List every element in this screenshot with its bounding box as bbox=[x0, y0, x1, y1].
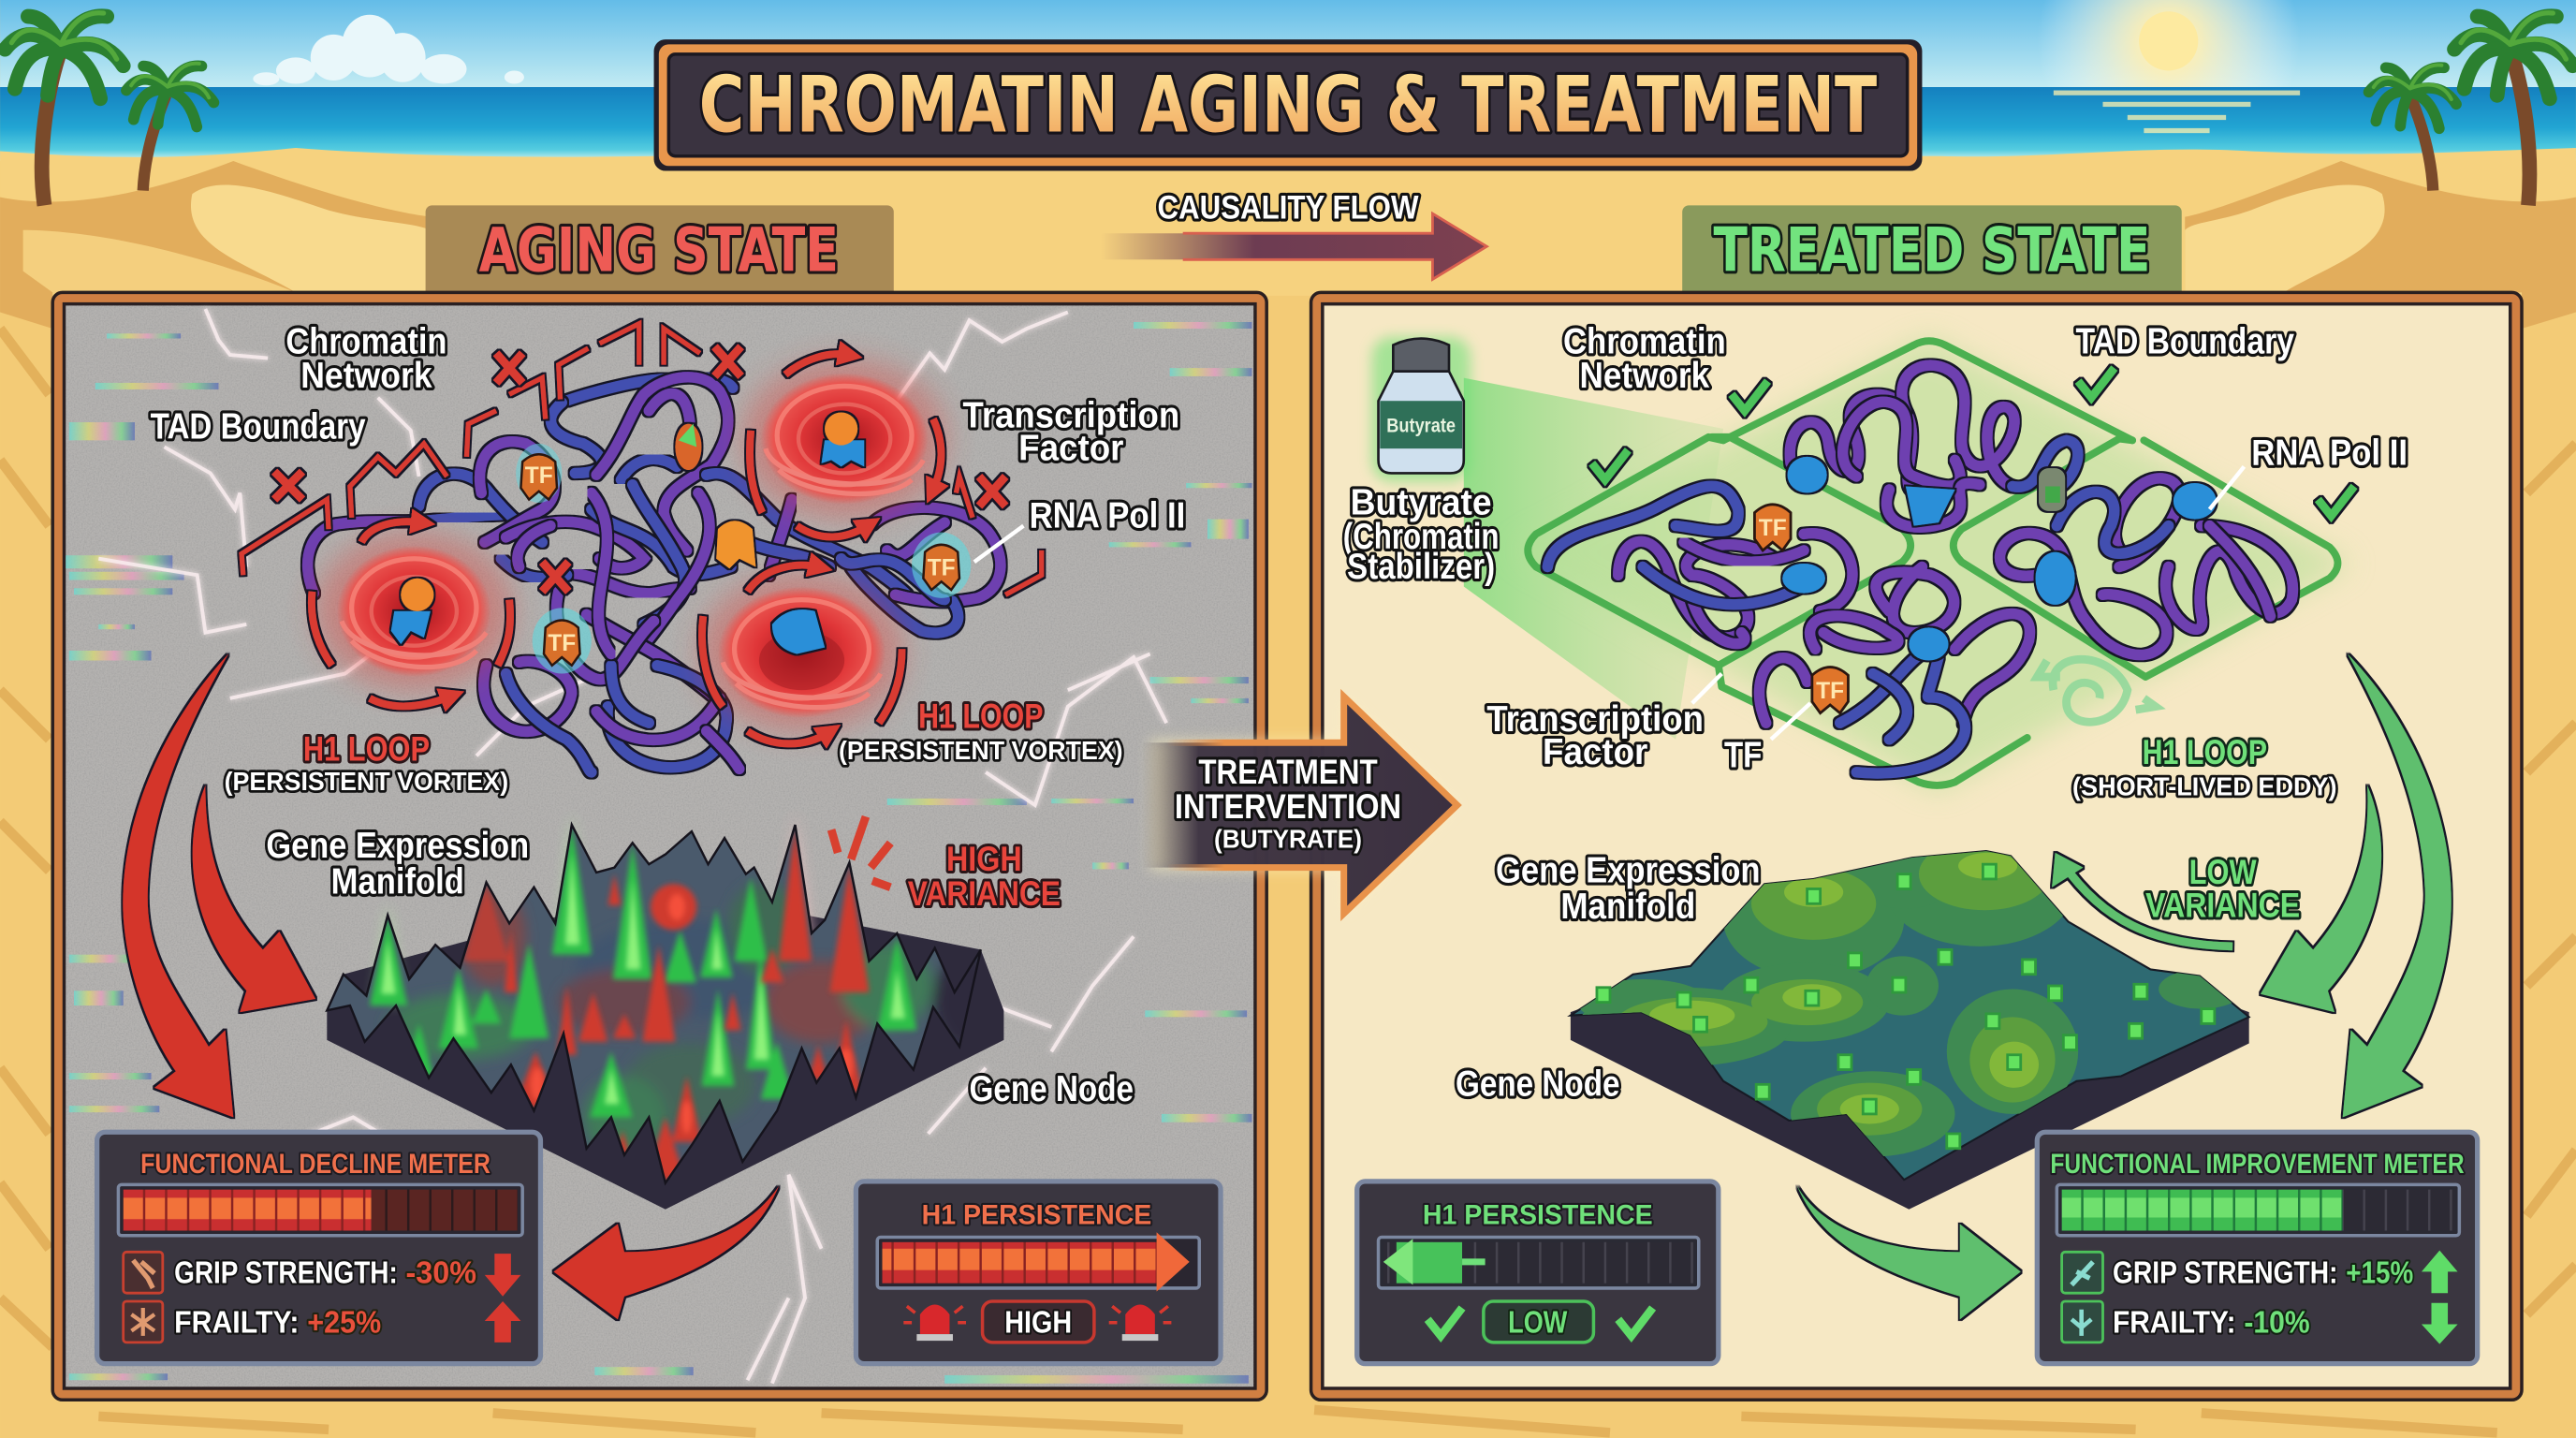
arrow: mid red causal bbox=[193, 785, 315, 1012]
icon: check left bbox=[1427, 1308, 1462, 1336]
metric: grip improved: GRIP STRENGTH: bbox=[2113, 1256, 2337, 1291]
label: transcription factor: Transcription bbox=[963, 395, 1179, 435]
label: chromatin network treated bbox=[1563, 321, 1726, 396]
arrow: treatment intervention: INTERVENTION bbox=[1175, 787, 1401, 826]
chart: spiky gene expression manifold bbox=[320, 814, 1010, 1210]
chromatin: top domain bbox=[1790, 365, 2078, 527]
icon: TF badge 2 bbox=[533, 608, 592, 674]
sky bbox=[0, 0, 2576, 89]
label: chromatin network treated: Network bbox=[1580, 356, 1710, 396]
label: chromatin network treated: Chromatin bbox=[1563, 321, 1726, 361]
metric: grip improved: +15% bbox=[2346, 1256, 2413, 1291]
label: transcription factor treated bbox=[1486, 674, 1721, 772]
label: chromatin network: Chromatin bbox=[285, 321, 446, 361]
sun reflection bbox=[2054, 91, 2300, 133]
label: TF bbox=[1724, 703, 1810, 776]
icon: TF badge treated 1: TF bbox=[1759, 516, 1787, 541]
label: butyrate: (Chromatin bbox=[1343, 517, 1500, 557]
red X marks bbox=[274, 346, 1005, 592]
shoreline bbox=[0, 148, 2576, 296]
icon: arrow down green bbox=[2422, 1303, 2458, 1344]
panel: treated state bbox=[1311, 292, 2522, 1400]
TAD lattice bbox=[1528, 341, 2337, 785]
lightning bbox=[98, 309, 1166, 1384]
icon: TF badge 3 bbox=[912, 533, 971, 598]
arrow: green to improvement meter bbox=[1797, 1186, 2021, 1319]
arrow: treatment intervention bbox=[1142, 697, 1457, 914]
icon: check right bbox=[1618, 1308, 1653, 1336]
persistence bar low bbox=[1379, 1238, 1699, 1288]
label: H1 loop short-lived: H1 LOOP bbox=[2143, 733, 2267, 771]
persistence bar bbox=[877, 1232, 1199, 1291]
label: H1 loop short-lived: (SHORT-LIVED EDDY) bbox=[2072, 771, 2337, 800]
icon: alarm right bbox=[1109, 1304, 1171, 1341]
label: gene expression manifold treated bbox=[1496, 850, 1761, 927]
functional improvement meter: FUNCTIONAL IMPROVEMENT METER bbox=[2050, 1149, 2465, 1180]
icon: polymerase blobs bbox=[1782, 457, 2217, 661]
metric: frailty improved: -10% bbox=[2244, 1305, 2310, 1340]
check marks bbox=[1592, 368, 2354, 516]
icon: green marker protein bbox=[2039, 468, 2065, 511]
vortex: top right bbox=[742, 360, 946, 518]
label: H1 loop right: (PERSISTENT VORTEX) bbox=[839, 736, 1123, 765]
label: low variance: VARIANCE bbox=[2145, 886, 2300, 924]
title: CHROMATIN AGING & TREATMENT bbox=[699, 60, 1877, 150]
gene nodes bbox=[1597, 864, 2215, 1149]
chromatin: right domain bbox=[2000, 478, 2292, 655]
broken TAD boundary bbox=[242, 324, 1042, 594]
functional decline meter bbox=[97, 1132, 540, 1364]
metric: frailty improved: FRAILTY: bbox=[2113, 1305, 2236, 1340]
functional improvement meter bbox=[2037, 1132, 2478, 1364]
label: H1 loop left: (PERSISTENT VORTEX) bbox=[225, 767, 508, 796]
icon: palm tree left large bbox=[5, 13, 124, 205]
label: gene expression manifold bbox=[266, 826, 529, 902]
icon: palm tree right small bbox=[2369, 65, 2456, 191]
chromatin: left domain bbox=[1547, 486, 1852, 644]
label: high variance bbox=[831, 816, 1061, 913]
icon: protein in left vortex bbox=[391, 579, 433, 644]
label: gene expression manifold treated: Gene Expression bbox=[1496, 850, 1761, 890]
label: high variance: VARIANCE bbox=[908, 874, 1061, 913]
icon: palm tree right large bbox=[2454, 13, 2572, 205]
vortex: lower right bbox=[700, 574, 903, 731]
vortex: left bbox=[315, 533, 513, 690]
label: gene node: Gene Node bbox=[970, 1069, 1134, 1109]
label: butyrate: Stabilizer) bbox=[1347, 547, 1495, 587]
glitch bars bbox=[66, 322, 1251, 1384]
arrow: long red causal bbox=[123, 654, 233, 1117]
label: transcription factor: Factor bbox=[1018, 428, 1123, 468]
sea bbox=[0, 87, 2576, 161]
label: H1 loop left bbox=[225, 730, 508, 796]
functional decline meter: FUNCTIONAL DECLINE METER bbox=[140, 1149, 490, 1180]
label: gene node treated: Gene Node bbox=[1456, 1064, 1620, 1105]
H1 persistence meter: low: H1 PERSISTENCE bbox=[1423, 1199, 1653, 1230]
icon: frailty improved bbox=[2062, 1301, 2102, 1343]
lattice glow bbox=[1515, 337, 2352, 792]
label: H1 loop short-lived bbox=[2072, 733, 2337, 800]
heading tab: treated state bbox=[1682, 205, 2182, 298]
noise texture bbox=[66, 305, 1253, 1387]
label: high variance: HIGH bbox=[946, 840, 1022, 878]
chromatin: bottom domain bbox=[1759, 566, 2029, 773]
status: high: HIGH bbox=[1004, 1305, 1072, 1340]
icon: TF badge 1 bbox=[516, 444, 562, 503]
icon: orange protein bbox=[716, 521, 755, 568]
icon: TF badge 3: TF bbox=[928, 555, 956, 580]
status: low: LOW bbox=[1508, 1305, 1568, 1340]
label: TAD boundary treated: TAD Boundary bbox=[2076, 321, 2294, 361]
dunes bbox=[0, 161, 431, 329]
pale glow above peaks bbox=[374, 814, 815, 1003]
label: H1 loop left: H1 LOOP bbox=[303, 730, 430, 769]
label: RNA Pol II bbox=[974, 495, 1185, 562]
status: low bbox=[1484, 1301, 1593, 1343]
label: RNA Pol II treated: RNA Pol II bbox=[2251, 433, 2408, 474]
icon: arrow down bbox=[485, 1254, 520, 1297]
arrow: causality flow bbox=[1101, 189, 1486, 279]
green beam from butyrate bbox=[1464, 378, 1723, 740]
icon: TF badge treated 2: TF bbox=[1816, 679, 1844, 704]
label: butyrate: Butyrate bbox=[1351, 482, 1492, 522]
title bbox=[654, 39, 1922, 171]
icon: TF badge treated 1 bbox=[1754, 505, 1791, 550]
status: high bbox=[983, 1301, 1094, 1343]
sun bbox=[2037, 0, 2300, 172]
clouds bbox=[253, 15, 524, 85]
icon: arrow up bbox=[485, 1301, 520, 1343]
icon: RNA polymerase in lower vortex bbox=[772, 609, 825, 654]
label: TF: TF bbox=[1724, 736, 1762, 776]
H1 persistence meter: high bbox=[856, 1181, 1221, 1364]
metric: frailty: FRAILTY: bbox=[174, 1305, 299, 1340]
terrain contours bbox=[1577, 829, 2244, 1157]
icon: short-lived eddy bbox=[2037, 659, 2156, 722]
arrow: long green causal bbox=[2343, 654, 2452, 1117]
arrow: treatment intervention: TREATMENT bbox=[1198, 753, 1378, 791]
icon: butyrate bottle bbox=[1372, 337, 1471, 481]
metric: grip strength: -30% bbox=[406, 1256, 476, 1291]
label: H1 loop right bbox=[839, 697, 1123, 765]
metric: frailty: +25% bbox=[307, 1305, 381, 1340]
metric: grip strength: GRIP STRENGTH: bbox=[174, 1256, 398, 1291]
sand stripes bbox=[0, 329, 2576, 1432]
icon: grip improved bbox=[2062, 1252, 2102, 1293]
icon: arrow up green bbox=[2422, 1251, 2458, 1293]
icon: protein in top vortex bbox=[822, 413, 864, 466]
arrow: green low variance bbox=[2052, 853, 2232, 946]
icon: grip strength bbox=[124, 1252, 163, 1293]
metric: frailty improved bbox=[2113, 1305, 2310, 1340]
label: low variance bbox=[2145, 853, 2300, 924]
icon: damaged marker bbox=[675, 424, 701, 470]
icon: butyrate bottle: Butyrate bbox=[1386, 416, 1456, 437]
metric: frailty bbox=[174, 1305, 381, 1340]
arrow: treatment intervention: (BUTYRATE) bbox=[1214, 825, 1362, 854]
icon: TF badge 2: TF bbox=[548, 631, 576, 656]
icon: TF badge treated 2 bbox=[1812, 668, 1848, 713]
label: chromatin network bbox=[285, 321, 446, 396]
decline bar bbox=[118, 1184, 522, 1236]
panel: aging state bbox=[52, 292, 1266, 1400]
label: transcription factor treated: Transcription bbox=[1486, 699, 1704, 740]
heading tab: aging state: AGING STATE bbox=[479, 216, 839, 286]
label: chromatin network: Network bbox=[300, 356, 432, 396]
label: RNA Pol II treated bbox=[2210, 433, 2408, 509]
label: low variance: LOW bbox=[2189, 853, 2257, 891]
label: butyrate bbox=[1343, 482, 1500, 587]
label: RNA Pol II: RNA Pol II bbox=[1030, 495, 1185, 536]
heading tab: aging state bbox=[426, 205, 894, 298]
H1 persistence meter: high: H1 PERSISTENCE bbox=[922, 1199, 1151, 1230]
improvement bar bbox=[2056, 1184, 2459, 1236]
heading tab: treated state: TREATED STATE bbox=[1714, 216, 2150, 286]
chart: tangled chromatin network bbox=[308, 377, 1001, 772]
label: transcription factor bbox=[963, 395, 1179, 468]
arrow: red to decline meter bbox=[554, 1186, 779, 1319]
label: gene expression manifold treated: Manifold bbox=[1560, 887, 1695, 927]
arrow: mid green causal bbox=[2261, 785, 2381, 1012]
label: TAD boundary: TAD Boundary bbox=[151, 407, 366, 448]
icon: frailty bbox=[124, 1301, 163, 1343]
H1 persistence meter: low bbox=[1357, 1181, 1719, 1364]
icon: palm tree left small bbox=[126, 64, 213, 191]
icon: alarm left bbox=[903, 1304, 966, 1341]
icon: TF badge 1: TF bbox=[525, 463, 553, 489]
surface outline bbox=[327, 825, 981, 1183]
surface bbox=[329, 829, 978, 1180]
arrow: causality flow: CAUSALITY FLOW bbox=[1157, 189, 1419, 226]
label: transcription factor treated: Factor bbox=[1543, 732, 1647, 772]
chart: smooth gene expression manifold bbox=[1571, 829, 2249, 1210]
label: gene expression manifold: Gene Expression bbox=[266, 826, 529, 866]
swirl arrows bbox=[312, 354, 941, 743]
label: H1 loop right: H1 LOOP bbox=[918, 697, 1044, 735]
label: gene expression manifold: Manifold bbox=[331, 862, 464, 902]
